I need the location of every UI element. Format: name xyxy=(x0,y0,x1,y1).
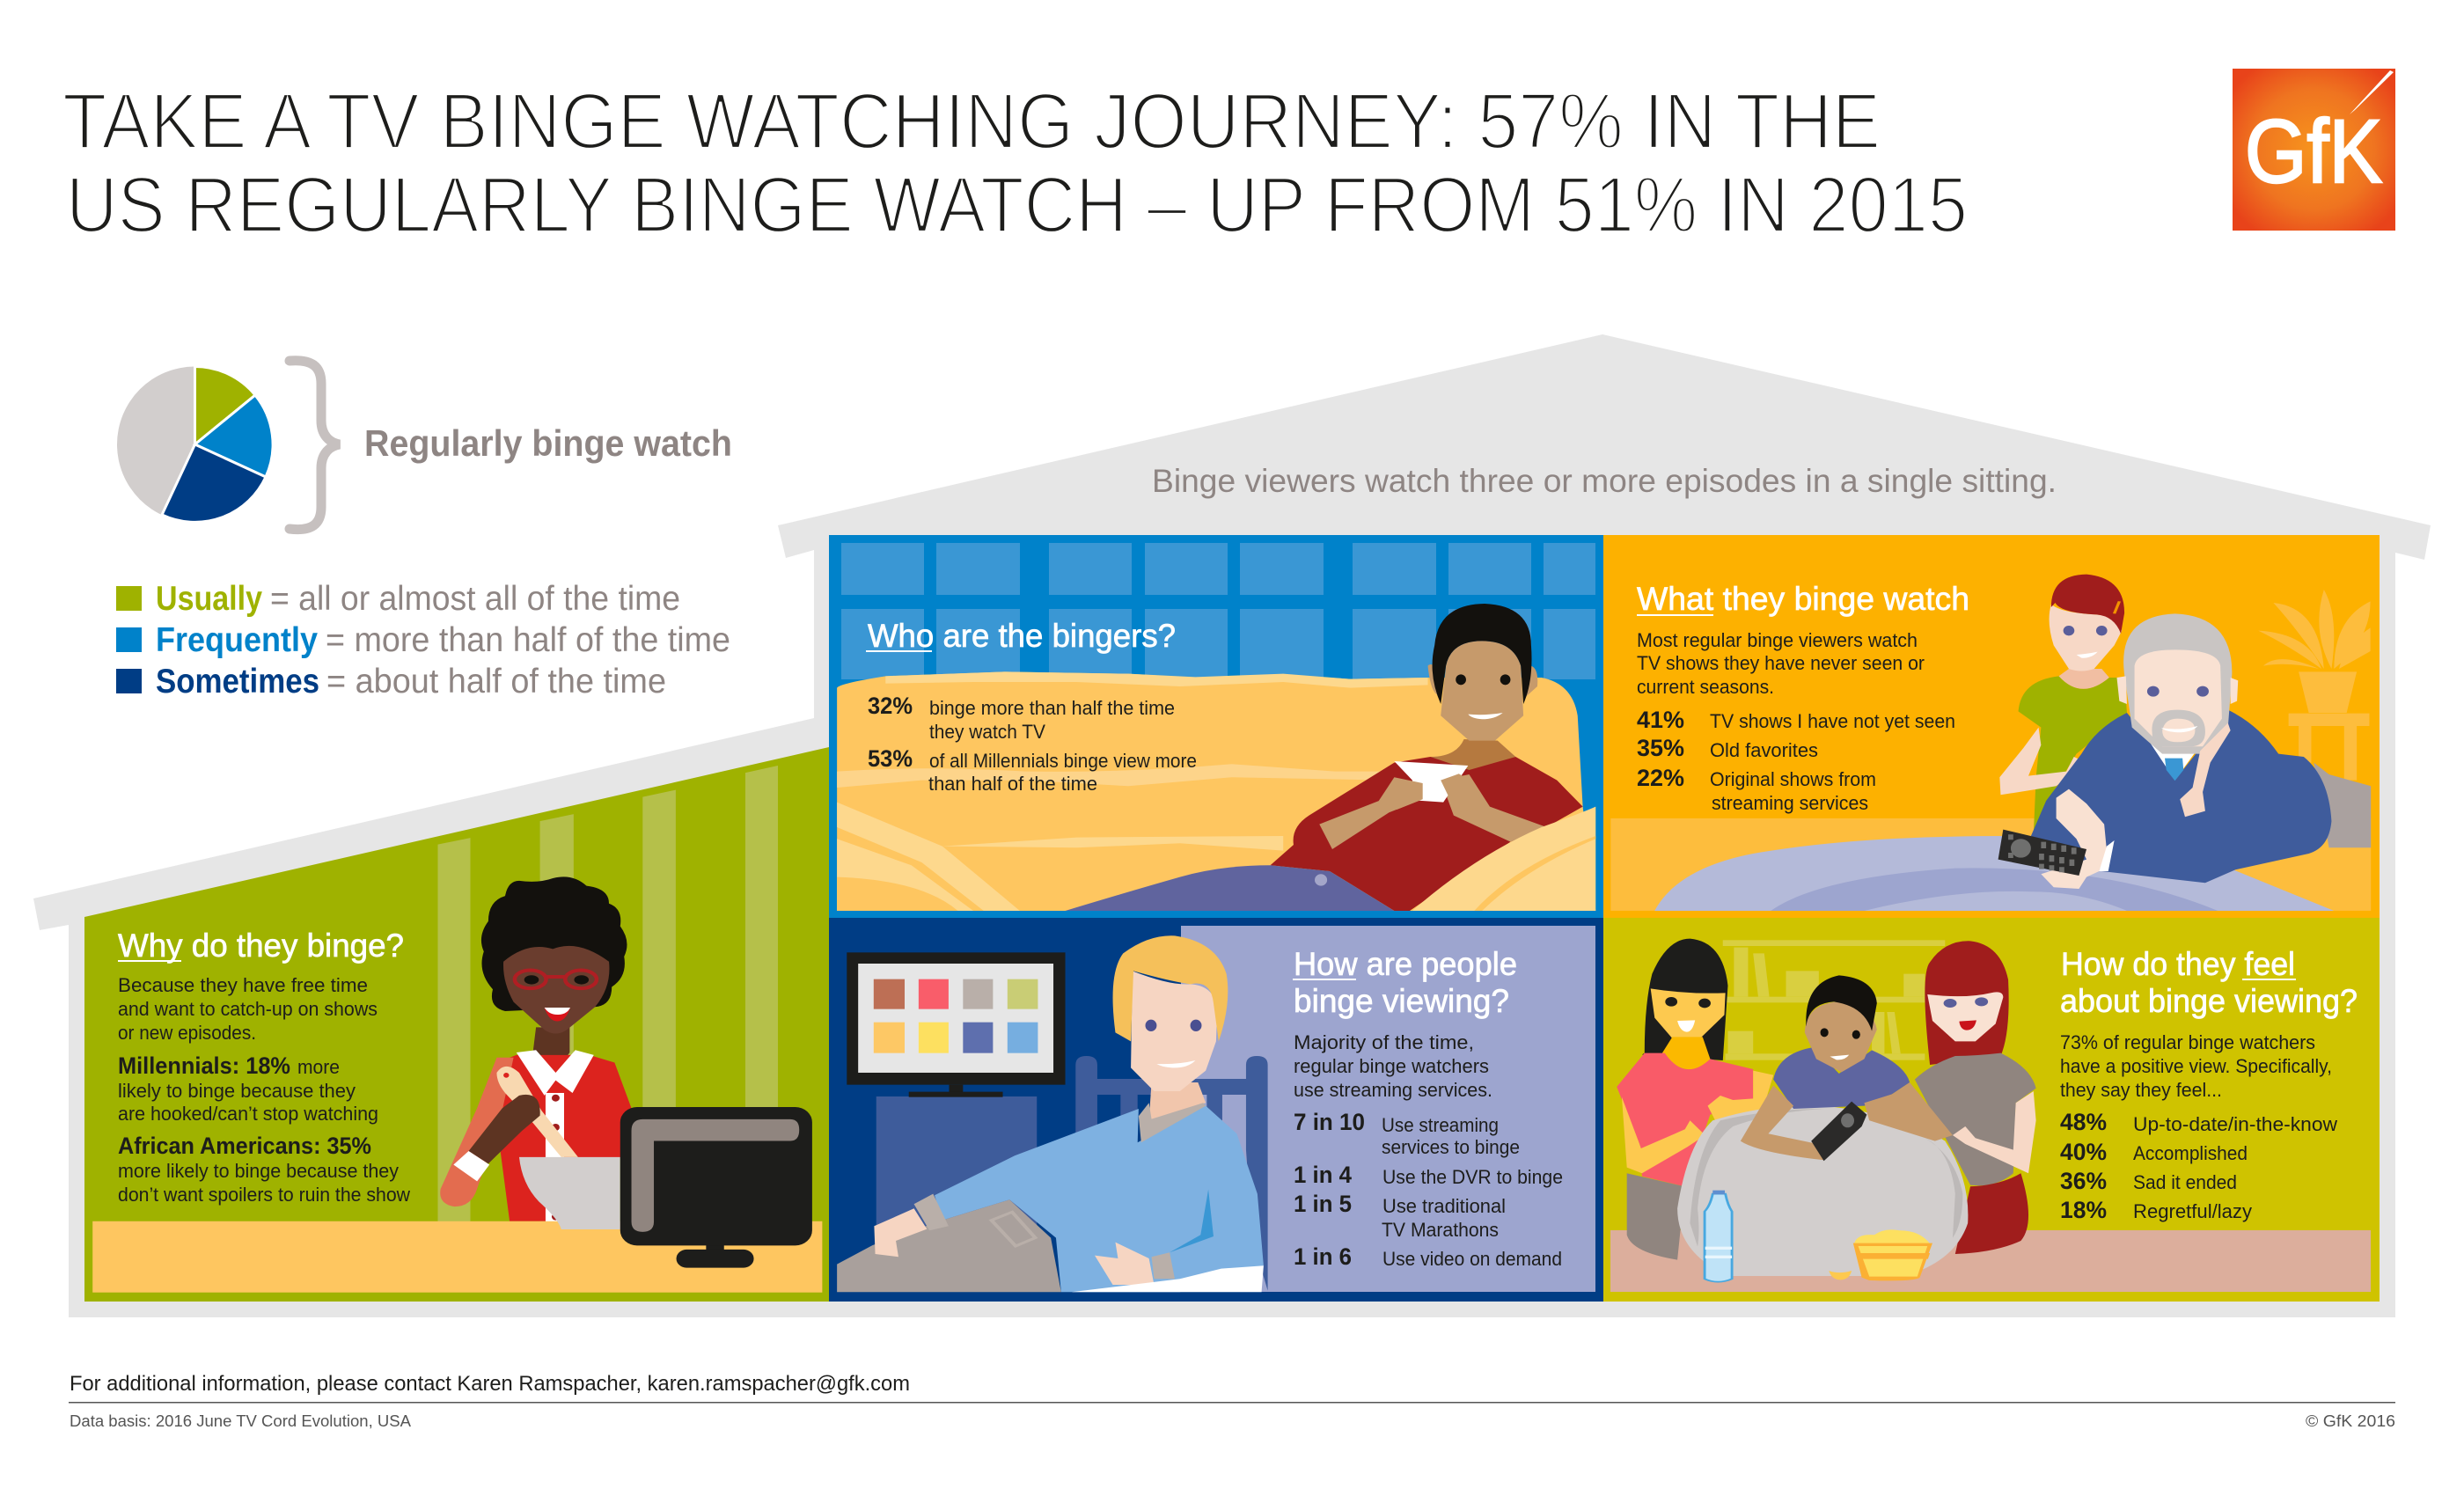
text: what intro: Most regular binge viewers watch xyxy=(1637,629,1918,651)
text: why details: are hooked/can’t stop watching xyxy=(118,1103,378,1125)
panel: how are people binge viewing xyxy=(829,918,1603,1302)
heading: why: Why do they binge? xyxy=(118,928,404,964)
text: who stats: 53% xyxy=(868,745,913,772)
illustration: man and girl with remote xyxy=(1654,575,2371,911)
text: who stats: of all Millennials binge view more xyxy=(929,750,1197,772)
text: feel stats: 40% xyxy=(2060,1139,2107,1165)
text: how stats: Use video on demand xyxy=(1382,1248,1562,1270)
panel: why do they binge xyxy=(84,747,829,1302)
title: TAKE A TV BINGE WATCHING JOURNEY: 57% IN THE xyxy=(62,78,1881,166)
text: why details: Millennials: 18% xyxy=(118,1052,290,1079)
text: how stats xyxy=(1294,1109,1563,1270)
text: who stats: binge more than half the time xyxy=(929,697,1175,719)
text: who stats: they watch TV xyxy=(929,721,1045,743)
text: what intro xyxy=(1637,629,1925,698)
text: how stats: Use streaming xyxy=(1382,1114,1499,1136)
footer: Data basis: 2016 June TV Cord Evolution, USA xyxy=(70,1412,411,1430)
heading: how xyxy=(1293,946,1517,1019)
text: what stats: TV shows I have not yet seen xyxy=(1710,710,1955,732)
text: what stats xyxy=(1637,707,1955,814)
logo: GfK: GfK xyxy=(2245,101,2382,202)
panel: how do they feel xyxy=(1603,918,2380,1302)
text: how stats: 1 in 6 xyxy=(1294,1243,1352,1270)
pie chart: regularly binge watch share xyxy=(117,366,273,523)
text: how stats: Use the DVR to binge xyxy=(1382,1166,1563,1188)
illustration: bookshelf xyxy=(1723,940,1945,1060)
heading: feel: How do they feel xyxy=(2061,946,2295,982)
title xyxy=(62,78,1968,250)
footer xyxy=(69,1372,2395,1430)
text: feel stats: 48% xyxy=(2060,1109,2107,1135)
roof caption: Binge viewers watch three or more episodes in a single sitting. xyxy=(1152,463,2057,499)
text: feel stats: Accomplished xyxy=(2133,1142,2248,1164)
text: how stats: Use traditional xyxy=(1382,1195,1506,1217)
logo: GfK xyxy=(2233,69,2395,231)
text: what intro: current seasons. xyxy=(1637,676,1774,698)
footer: © GfK 2016 xyxy=(2306,1412,2395,1430)
text: feel intro: 73% of regular binge watchers xyxy=(2060,1031,2315,1053)
text: feel stats: Sad it ended xyxy=(2133,1171,2237,1193)
text: how stats: 1 in 5 xyxy=(1294,1191,1352,1217)
text: why details: likely to binge because they xyxy=(118,1080,356,1102)
text: who stats: 32% xyxy=(868,693,913,719)
label: regularly binge watch: Regularly binge watch xyxy=(364,422,732,464)
text: feel stats xyxy=(2060,1109,2338,1223)
text: what stats: Old favorites xyxy=(1710,739,1818,761)
text: how stats: services to binge xyxy=(1382,1136,1520,1158)
text: why details: more likely to binge because they xyxy=(118,1160,400,1182)
text: how stats: TV Marathons xyxy=(1382,1219,1499,1241)
text: why details: and want to catch-up on shows xyxy=(118,998,378,1020)
text: what stats: Original shows from xyxy=(1710,768,1876,790)
text: feel intro: they say they feel... xyxy=(2060,1079,2222,1101)
text: why details: or new episodes. xyxy=(118,1022,256,1044)
text: feel stats: Up-to-date/in-the-know xyxy=(2133,1113,2338,1135)
text: feel intro xyxy=(2060,1031,2332,1101)
legend: Usually xyxy=(156,580,262,618)
illustration: man on sofa xyxy=(837,604,1595,911)
illustration: three friends on beanbag xyxy=(1617,939,2036,1282)
heading: what: What they binge watch xyxy=(1637,581,1969,617)
text: why details: Because they have free time xyxy=(118,974,368,996)
text: why details: don’t want spoilers to ruin the show xyxy=(118,1184,411,1206)
heading: how: binge viewing? xyxy=(1294,983,1509,1019)
illustration: man in chair xyxy=(837,935,1268,1292)
text: why details: African Americans: 35% xyxy=(118,1133,371,1159)
footer: For additional information, please contact Karen Ramspacher, karen.ramspacher@gfk.com xyxy=(70,1372,910,1396)
text: feel stats: Regretful/lazy xyxy=(2133,1200,2253,1222)
title: US REGULARLY BINGE WATCH – UP FROM 51% IN 2015 xyxy=(66,162,1968,250)
legend: Sometimes xyxy=(156,663,319,700)
text: what stats: 22% xyxy=(1637,765,1684,791)
text: feel stats: 36% xyxy=(2060,1168,2107,1194)
panel: what they binge watch xyxy=(1603,535,2380,918)
illustration: tv and cabinet xyxy=(847,952,1066,1261)
text: how intro xyxy=(1294,1031,1492,1101)
panel: who are the bingers xyxy=(829,535,1603,918)
text: how intro: regular binge watchers xyxy=(1294,1055,1489,1077)
house outline xyxy=(33,334,2431,1317)
text: how stats: 1 in 4 xyxy=(1294,1162,1352,1188)
legend: Frequently xyxy=(156,621,318,659)
legend: = more than half of the time xyxy=(326,621,730,659)
text: how intro: use streaming services. xyxy=(1294,1079,1492,1101)
text: who stats: than half of the time xyxy=(928,773,1097,795)
text: what intro: TV shows they have never seen or xyxy=(1637,652,1925,674)
curly brace xyxy=(290,361,340,530)
illustration: kitchen tv xyxy=(620,1107,812,1268)
text: feel stats: 18% xyxy=(2060,1197,2107,1223)
legend: = all or almost all of the time xyxy=(270,580,680,618)
text: feel intro: have a positive view. Specifically, xyxy=(2060,1055,2332,1077)
text: why details: more xyxy=(297,1056,340,1078)
text: what stats: 41% xyxy=(1637,707,1684,733)
heading: who: Who are the bingers? xyxy=(868,618,1176,654)
legend xyxy=(116,580,730,700)
illustration: plant and floor xyxy=(1610,590,2371,911)
illustration: woman cooking xyxy=(92,766,822,1293)
text: how intro: Majority of the time, xyxy=(1294,1031,1474,1053)
heading: feel: about binge viewing? xyxy=(2060,983,2358,1019)
legend: = about half of the time xyxy=(326,663,666,700)
text: how stats: 7 in 10 xyxy=(1294,1109,1365,1135)
heading: how: How are people xyxy=(1294,946,1517,982)
text: who stats xyxy=(868,693,1197,795)
text: what stats: streaming services xyxy=(1712,792,1868,814)
heading: feel xyxy=(2060,946,2358,1019)
text: what stats: 35% xyxy=(1637,735,1684,761)
window panes xyxy=(841,543,1595,679)
text: why details xyxy=(118,974,411,1206)
